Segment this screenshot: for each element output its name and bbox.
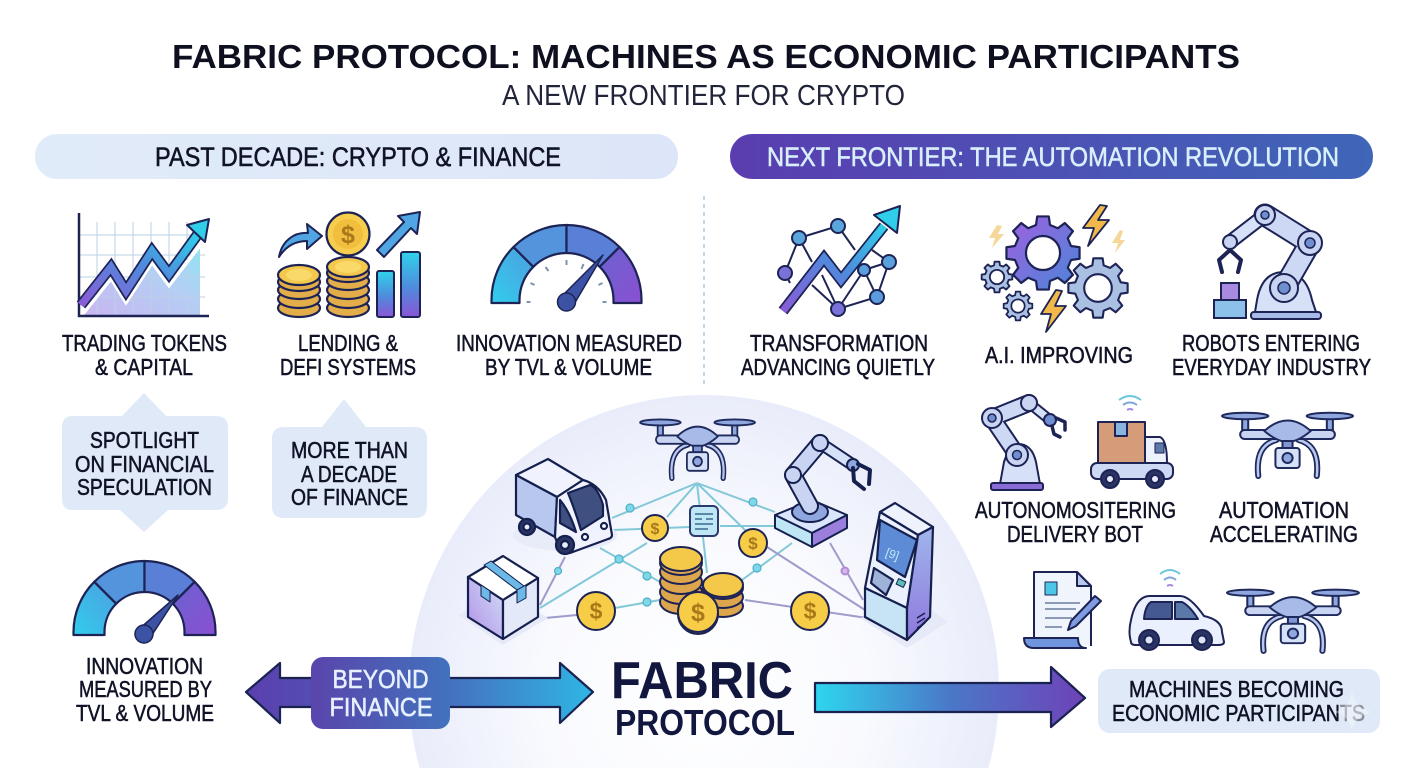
label: DELIVERY BOT: [1007, 521, 1143, 547]
icon: central drone: [640, 419, 755, 478]
coins: central stacks and tokens: $: [651, 521, 660, 538]
centre title: fabric protocol: FABRIC: [611, 652, 793, 710]
icon: kiosk terminal: [9]: [884, 545, 901, 563]
panel: trading tokens: [62, 213, 227, 380]
centre title: fabric protocol: [611, 652, 795, 743]
document node: [690, 506, 718, 536]
label: ROBOTS ENTERING: [1182, 330, 1360, 356]
label: ACCELERATING: [1210, 521, 1358, 547]
icon: drone: [1222, 413, 1353, 476]
callout: machines becoming economic participants: MACHINES BECOMING: [1129, 676, 1344, 702]
label: DEFI SYSTEMS: [280, 354, 416, 380]
title: FABRIC PROTOCOL: MACHINES AS ECONOMIC PARTICIPANTS: [172, 38, 1240, 75]
panel: transformation: [741, 206, 935, 380]
network connections: [540, 483, 867, 618]
icon: kiosk terminal: [860, 503, 948, 648]
callout: more than a decade of finance: [272, 399, 427, 518]
label: beyond finance: FINANCE: [330, 692, 432, 722]
panel: autonomous delivery bot: [975, 395, 1176, 547]
label: INNOVATION MEASURED: [456, 330, 682, 356]
label: [741, 330, 935, 380]
callout: more than a decade of finance: OF FINANCE: [291, 484, 408, 510]
arrow: to machines: [815, 667, 1085, 727]
centre title: fabric protocol: PROTOCOL: [615, 702, 795, 743]
label: TVL & VOLUME: [76, 700, 214, 726]
panel: robots entering industry: [1172, 205, 1371, 380]
heading: next frontier: [730, 134, 1373, 179]
callout: spotlight on financial speculation: SPOTLIGHT: [90, 427, 199, 453]
coins: central stacks and tokens: $: [691, 599, 705, 627]
callout: machines becoming economic participants: ECONOMIC PARTICIPANTS: [1112, 700, 1365, 726]
coins: central stacks and tokens: $: [804, 598, 817, 624]
label: ADVANCING QUIETLY: [741, 354, 935, 380]
label: [975, 497, 1176, 547]
label: TRADING TOKENS: [62, 330, 227, 356]
panel: lower left gauge: [74, 561, 216, 726]
label: TRANSFORMATION: [750, 330, 928, 356]
heading: past decade: [35, 134, 678, 179]
heading: next frontier: NEXT FRONTIER: THE AUTOMATION REVOLUTION: [767, 142, 1339, 172]
icon: robot arm centre: [775, 435, 870, 547]
label: [62, 330, 227, 380]
coins: central stacks and tokens: $: [748, 534, 758, 553]
label: [1172, 330, 1371, 380]
callout: machines becoming economic participants: [1098, 669, 1380, 733]
panel: ai improving: [982, 205, 1133, 368]
label: [1210, 497, 1358, 547]
icon: network with rising arrow: [778, 206, 900, 316]
label: AUTONOMOSITERING: [975, 497, 1176, 523]
label: beyond finance: BEYOND: [332, 664, 428, 694]
label: [280, 330, 416, 380]
icon: coins and bars: [278, 212, 420, 317]
icon: line chart: [79, 213, 209, 316]
subtitle: A NEW FRONTIER FOR CRYPTO: [502, 80, 905, 112]
callout: spotlight on financial speculation: [62, 393, 228, 532]
label: BY TVL & VOLUME: [485, 354, 652, 380]
panel: automation accelerating: [1210, 413, 1358, 547]
icon: contract document: [1024, 572, 1101, 648]
coins: central stacks and tokens: $: [590, 598, 603, 624]
label: & CAPITAL: [95, 354, 193, 380]
icon: coins and bars: $: [341, 221, 355, 249]
icon: robot arm: [1214, 205, 1322, 319]
icon: delivery van: [513, 459, 617, 554]
callout: spotlight on financial speculation: SPECULATION: [77, 474, 212, 500]
label: beyond finance: [311, 657, 450, 729]
label: LENDING &: [298, 330, 398, 356]
callout: spotlight on financial speculation: ON FINANCIAL: [75, 451, 214, 477]
icon: gears and bolts: [982, 205, 1128, 332]
panel: innovation measured: [456, 225, 682, 380]
heading: past decade: PAST DECADE: CRYPTO & FINANCE: [155, 142, 561, 172]
label: AUTOMATION: [1219, 497, 1349, 523]
label: MEASURED BY: [79, 676, 212, 702]
panel: lending and defi: [278, 212, 420, 380]
callout: more than a decade of finance: A DECADE: [301, 461, 397, 487]
icon: robot arm: [982, 395, 1065, 490]
label: [456, 330, 682, 380]
icon: gauge: [74, 561, 216, 643]
icon: delivery truck: [1091, 396, 1173, 488]
icon: parcel box: [458, 556, 548, 645]
label: INNOVATION: [86, 653, 203, 679]
icon: gauge: [492, 225, 642, 311]
icon: drone lower: [1227, 590, 1359, 651]
coins: central stacks and tokens: [577, 515, 829, 634]
label: A.I. IMPROVING: [985, 342, 1133, 368]
central sphere background: [409, 395, 999, 768]
icon: autonomous car: [1130, 570, 1224, 650]
arrow: double headed beyond finance: [246, 663, 593, 723]
label: [76, 653, 214, 726]
callout: more than a decade of finance: MORE THAN: [291, 437, 408, 463]
